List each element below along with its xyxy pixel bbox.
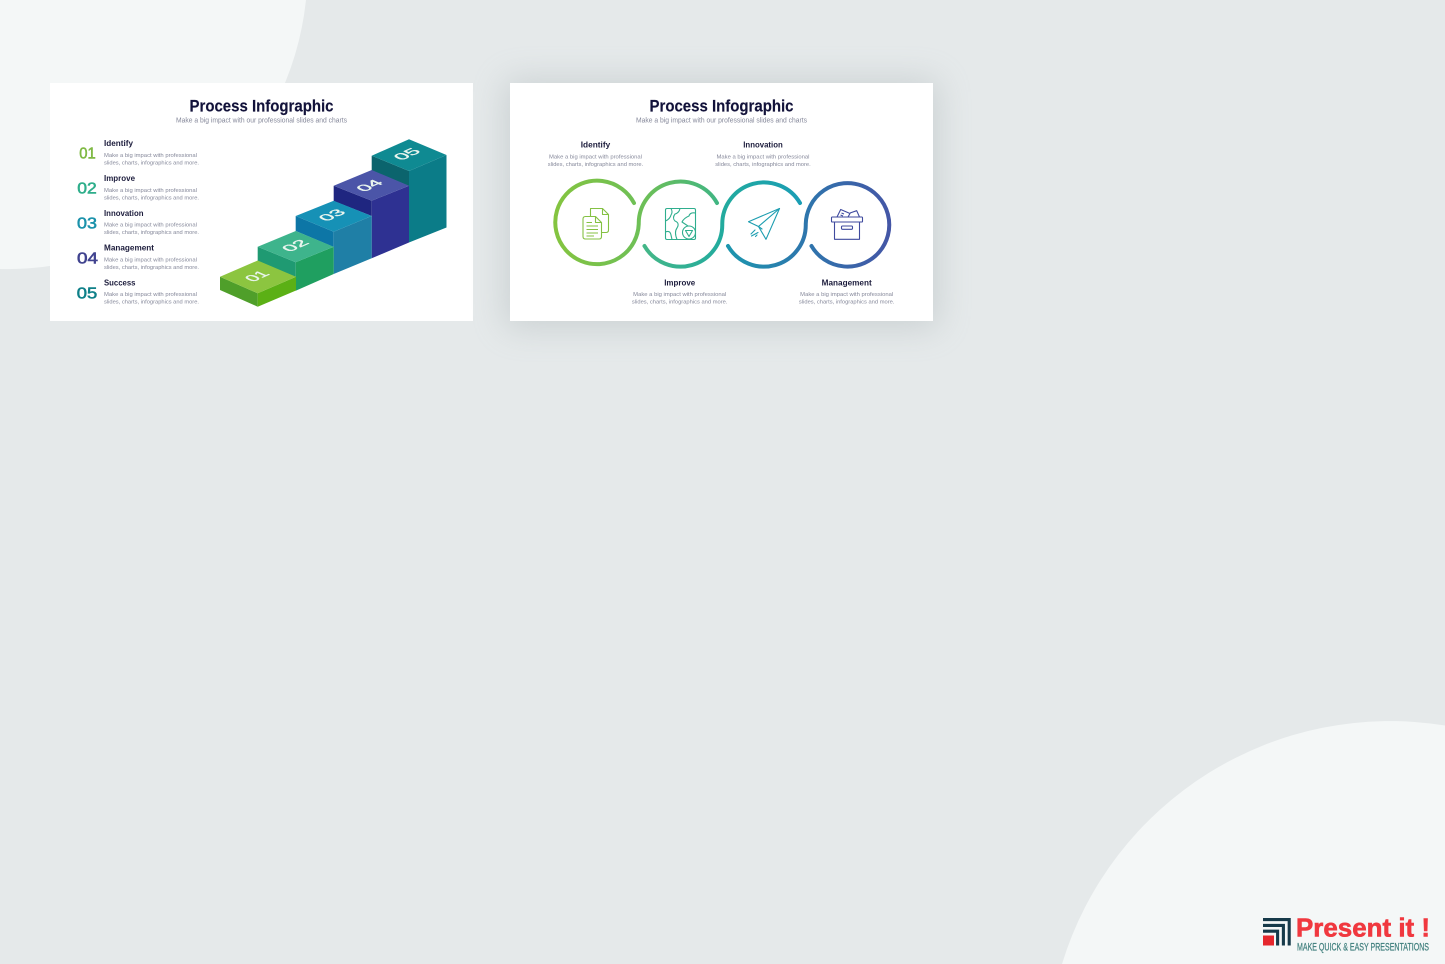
step block 03 (296, 201, 372, 274)
step list item 02 (77, 174, 199, 201)
label: Improve (632, 279, 728, 306)
title: Process Infographic (190, 96, 334, 116)
step list item 05 (77, 278, 199, 306)
label: Management: slides, charts, infographics and more. (799, 300, 895, 306)
linked circles chain (555, 181, 889, 267)
background circle top left (0, 0, 306, 269)
step list item 01: Identify (104, 139, 134, 148)
panel shadow (505, 80, 938, 328)
step list item 04: Management (104, 244, 154, 253)
icon: map (666, 208, 696, 240)
logo mark (1263, 920, 1289, 946)
background circle bottom right (1062, 721, 1445, 964)
logo: Present it (1263, 913, 1430, 954)
subtitle: Make a big impact with our professional slides and charts (176, 118, 347, 124)
step list item 03: slides, charts, infographics and more. (104, 230, 199, 236)
step block 02: 02 (278, 238, 314, 254)
step list item 05: Make a big impact with professional (104, 292, 197, 298)
step block 03: 03 (315, 207, 350, 223)
label: Innovation (715, 141, 811, 168)
panel: circles slide (510, 83, 933, 321)
step block 04: 04 (352, 178, 388, 194)
label: Improve: Improve (664, 279, 696, 288)
step list item 05: Success (104, 278, 136, 287)
isometric staircase chart (220, 139, 446, 307)
step list item 03 (77, 209, 199, 236)
icon: paper plane (748, 208, 780, 239)
step list item 02: slides, charts, infographics and more. (104, 195, 199, 201)
step list item 02: 02 (77, 180, 97, 197)
step block 01: 01 (241, 269, 274, 284)
step list item 03: Make a big impact with professional (104, 223, 197, 229)
panel: staircase slide (50, 83, 473, 321)
label: Identify (548, 141, 644, 168)
icon: documents (583, 208, 608, 239)
label: Identify: Make a big impact with professional (549, 154, 642, 160)
step list item 04: slides, charts, infographics and more. (104, 265, 199, 271)
label: Identify: slides, charts, infographics and more. (548, 162, 644, 168)
step block 04 (334, 170, 409, 258)
step block 02 (258, 231, 334, 291)
step list item 01: slides, charts, infographics and more. (104, 160, 199, 166)
step block 05 (372, 139, 446, 242)
logo wordmark: Present it ! (1296, 913, 1430, 943)
step list item 01: 01 (79, 145, 96, 162)
subtitle: Make a big impact with our professional slides and charts (636, 118, 807, 124)
step list item 03: 03 (77, 215, 97, 232)
step list item 05: 05 (77, 285, 97, 302)
step block 05: 05 (390, 146, 425, 162)
label: Innovation: slides, charts, infographics and more. (715, 162, 811, 168)
label: Improve: Make a big impact with professional (633, 292, 726, 298)
step list item 03: Innovation (104, 209, 144, 218)
step list item 02: Improve (104, 174, 136, 183)
step block 01 (220, 260, 296, 307)
icon: archive box (832, 210, 862, 239)
title: Process Infographic (650, 96, 794, 116)
label: Management: Make a big impact with professional (800, 292, 893, 298)
step list item 05: slides, charts, infographics and more. (104, 300, 199, 306)
step list item 04 (77, 244, 199, 271)
step list item 04: Make a big impact with professional (104, 257, 197, 263)
label: Innovation: Innovation (743, 141, 783, 150)
step list item 01 (79, 139, 199, 166)
label: Innovation: Make a big impact with professional (716, 154, 810, 160)
step list item 02: Make a big impact with professional (104, 188, 197, 194)
label: Management: Management (822, 279, 872, 288)
step list item 01: Make a big impact with professional (104, 153, 197, 159)
label: Management (799, 279, 895, 306)
step list item 04: 04 (77, 250, 98, 267)
label: Improve: slides, charts, infographics and more. (632, 300, 728, 306)
label: Identify: Identify (581, 141, 611, 150)
